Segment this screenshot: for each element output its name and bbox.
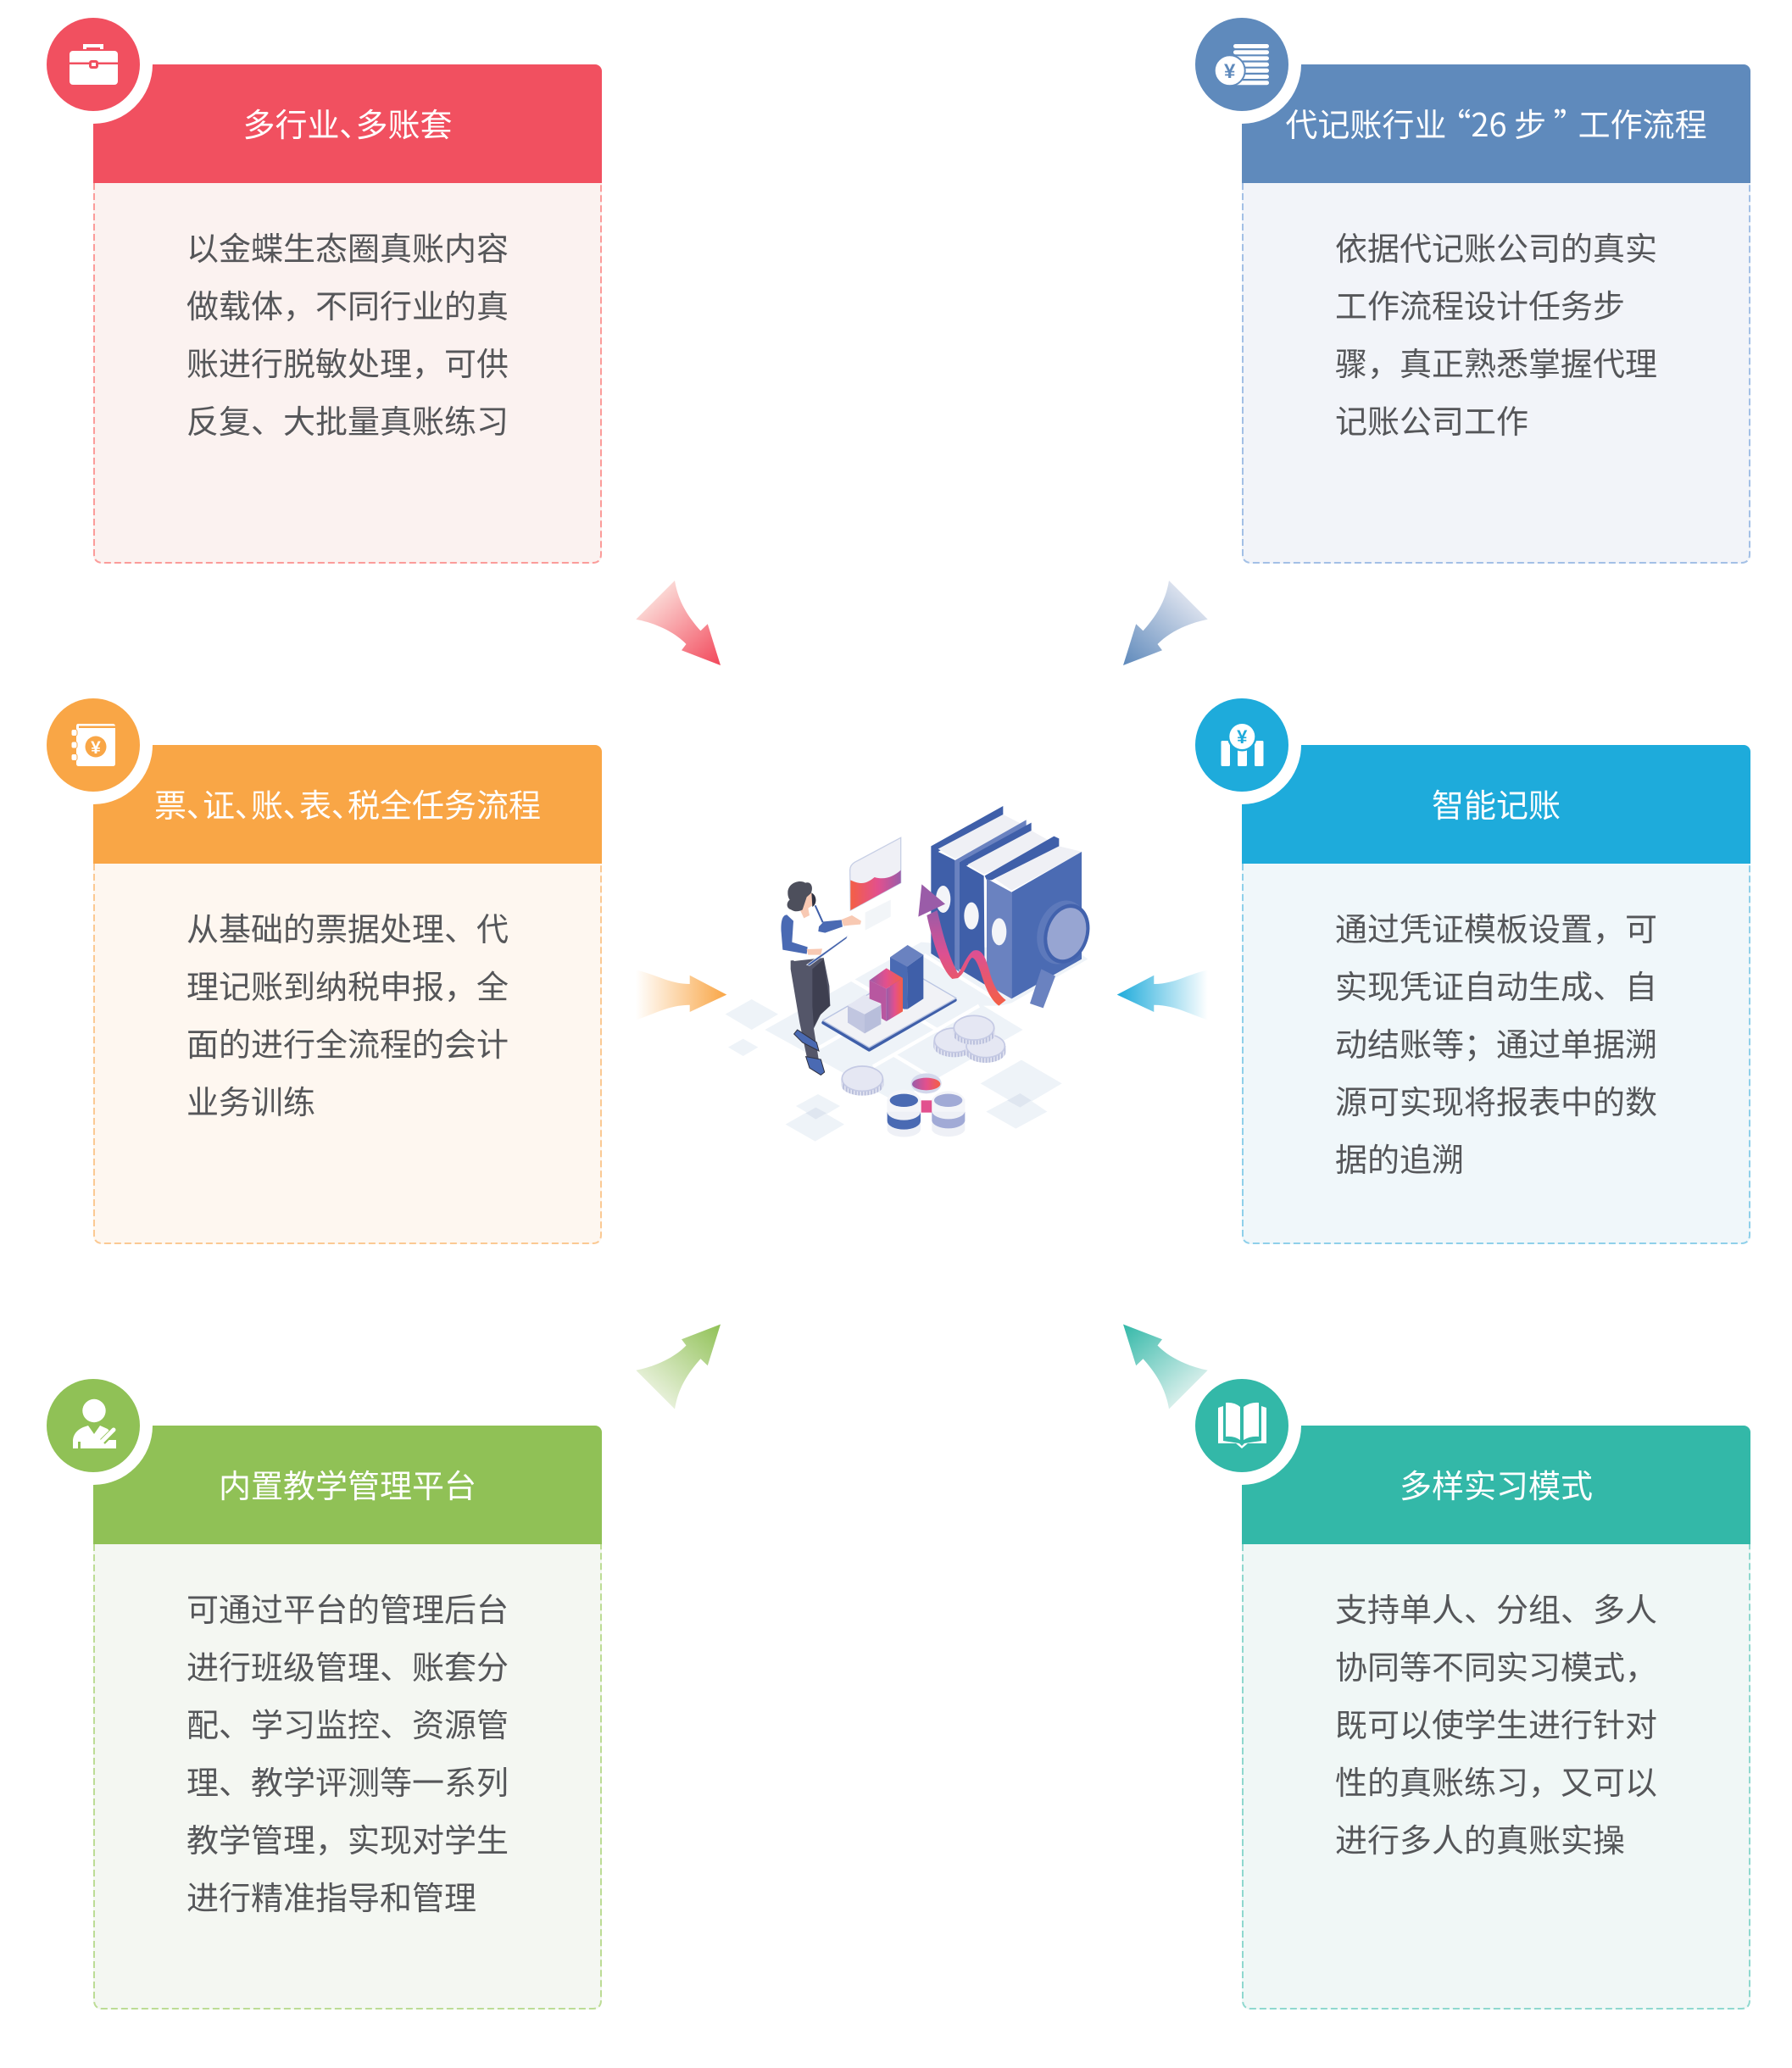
text: 进行多人的真账实操 [1335,1824,1625,1860]
body card: green [93,1544,602,2010]
text [186,913,509,1121]
central isometric illustration [726,806,1097,1142]
text: 动结账等；通过单据溯 [1335,1028,1657,1064]
text: 骤，真正熟悉掌握代理 [1335,347,1657,383]
header: 智能记账 [1242,745,1750,864]
text: 依据代记账公司的真实 [1335,232,1657,268]
text: 既可以使学生进行针对 [1335,1709,1657,1744]
header: 多样实习模式 [1242,1426,1750,1544]
text [1335,913,1657,1179]
arrow: blue to centre [1123,581,1208,665]
body card: red [93,183,602,564]
paint cylinders [888,1073,965,1137]
text: 进行精准指导和管理 [186,1882,476,1917]
header: 全任务流程 [93,745,602,864]
header: 内置教学管理平台 [93,1426,602,1544]
text: 理记账到纳税申报，全 [186,970,509,1006]
text: 支持单人、分组、多人 [1335,1593,1657,1629]
phone with bars [823,945,956,1050]
text: 做载体，不同行业的真 [186,290,509,325]
person [781,881,861,1075]
text: 源可实现将报表中的数 [1335,1086,1657,1121]
arrow: red to centre [636,581,721,665]
header: 多行业、多账套: 多行业、多账套 [242,99,453,146]
body card: teal [1242,1544,1750,2010]
header: 多行业、多账套 [93,64,602,183]
header: 全任务流程: 票、证、账、表、税全任务流程 [154,780,541,826]
header: 工作流程: 代记账行业“26 步 ”工作流程 [1285,99,1707,146]
text: 性的真账练习，又可以 [1335,1766,1657,1802]
header: 智能记账: 智能记账 [1432,780,1561,826]
text: 教学管理，实现对学生 [186,1824,509,1860]
text: 通过凭证模板设置，可 [1335,913,1657,948]
text: 账进行脱敏处理，可供 [186,347,509,383]
panel: 内置教学管理平台 [47,1379,602,2010]
icon: notebook: ¥ [91,738,101,758]
binders [931,806,1082,998]
text: 工作流程设计任务步 [1335,290,1625,325]
icon: open book [1195,1379,1288,1472]
text [1335,232,1657,441]
text: 实现凭证自动生成、自 [1335,970,1657,1006]
text: 从基础的票据处理、代 [186,913,509,948]
panel: 票、证、账、表、税全任务流程 [47,698,602,1244]
text: 记账公司工作 [1335,405,1528,441]
body card: sky [1242,864,1750,1244]
icon: briefcase [47,18,140,111]
icon: notebook [47,698,140,792]
text: 配、学习监控、资源管 [186,1709,509,1744]
text: 业务训练 [186,1086,315,1121]
magnifying glass [1029,894,1097,1008]
header: 工作流程 [1242,64,1750,183]
text: 反复、大批量真账练习 [186,405,509,441]
floor tiles [726,942,1088,1142]
text: 面的进行全流程的会计 [186,1028,509,1064]
icon: coin stack [1195,18,1288,111]
coins [841,1015,1005,1096]
text: 理、教学评测等一系列 [186,1766,509,1802]
text: 可通过平台的管理后台 [186,1593,509,1629]
arrow: cyan to centre [1117,970,1208,1020]
text [1335,1593,1657,1860]
body card: blue [1242,183,1750,564]
icon: teacher [47,1379,140,1472]
rising ribbon arrow [918,884,1006,1006]
header: 多样实习模式: 多样实习模式 [1400,1460,1593,1507]
arrow: orange to centre [636,970,726,1020]
arrow: green to centre [636,1324,721,1409]
panel: 多样实习模式 [1195,1379,1750,2010]
panel: 代记账行业“26 步 ”工作流程 [1195,18,1750,564]
text: 进行班级管理、账套分 [186,1651,509,1687]
text [186,1593,509,1917]
text: 协同等不同实习模式， [1335,1651,1657,1687]
header: 内置教学管理平台: 内置教学管理平台 [219,1460,476,1507]
panel: 智能记账 [1195,698,1750,1244]
text: 据的追溯 [1335,1143,1464,1179]
icon: coin stack: ¥ [1224,60,1236,83]
text: 以金蝶生态圈真账内容 [186,232,509,268]
floating chart card [850,837,901,931]
icon: bar chart with yen: ¥ [1237,726,1248,748]
arrow: teal to centre [1123,1324,1208,1409]
body card: orange [93,864,602,1244]
text [186,232,509,441]
panel: 多行业、多账套 [47,18,602,564]
icon: bar chart with yen [1195,698,1288,792]
